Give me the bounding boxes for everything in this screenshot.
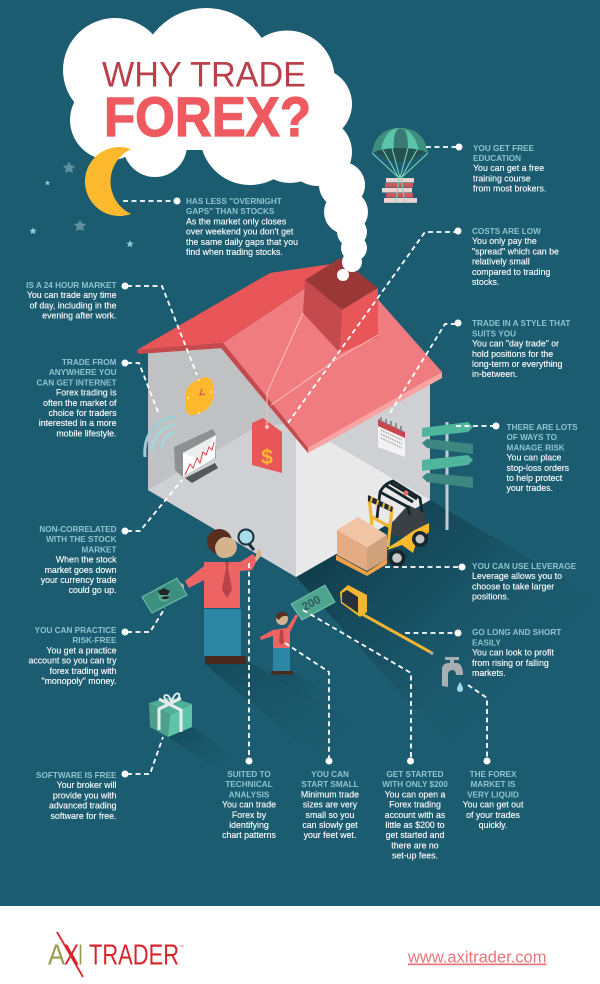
text: start small: sizes are very [303, 800, 358, 810]
icon: man with magnifying glass [176, 529, 261, 664]
text: trade from anywhere: choice for traders [49, 408, 117, 418]
text: trade style: SUITS YOU [472, 329, 516, 338]
text: technical analysis: chart patterns [222, 830, 276, 840]
footer logo: A [48, 940, 66, 972]
text: technical analysis: You can trade [222, 800, 276, 810]
text: technical analysis: ANALYSIS [229, 790, 270, 799]
forklift body [387, 523, 429, 553]
shadow: man [205, 660, 350, 770]
footer logo: ™ [180, 944, 184, 949]
text: only $200: account with as [385, 810, 446, 820]
icon: crescent moon [85, 147, 131, 216]
text: trade from anywhere: ANYWHERE YOU [49, 368, 117, 377]
text: manage risk: your trades. [506, 483, 553, 493]
text: technical analysis: SUITED TO [227, 770, 271, 779]
icon: $200 note [291, 585, 335, 620]
house back-right wall [296, 375, 430, 577]
text: start small: can slowly get [302, 820, 358, 830]
stars [29, 162, 134, 247]
icon: parachute with books [372, 128, 428, 203]
text: technical analysis: TECHNICAL [225, 780, 273, 789]
cloud and smoke [63, 8, 368, 281]
text: overnight gaps: As the market only closes [186, 216, 287, 226]
text: practice: account so you can try [28, 656, 117, 666]
text: costs are low: "spread" which can be [472, 246, 559, 256]
icon: monitor [174, 429, 218, 483]
text: only $200: GET STARTED [386, 770, 444, 779]
text: leverage: positions. [472, 592, 509, 602]
text: overnight gaps: the same daily gaps that you [186, 237, 298, 247]
text: software: software for free. [50, 811, 116, 821]
text: practice: You get a practice [46, 645, 117, 655]
footer logo: TRADER [89, 940, 179, 972]
text: overnight gaps: GAPS" THAN STOCKS [186, 207, 275, 216]
text: free education: YOU GET FREE [473, 144, 534, 153]
text: trade from anywhere: TRADE FROM [62, 358, 117, 367]
text: start small: START SMALL [301, 780, 359, 789]
text: non-correlated: When the stock [56, 555, 117, 565]
text: free education: EDUCATION [473, 154, 521, 163]
text: overnight gaps: over weekend you don't get [186, 227, 294, 237]
footer panel [0, 906, 600, 984]
text: liquid: quickly. [479, 820, 507, 830]
text: trade style: hold positions for the [472, 349, 553, 359]
text: liquid: You can get out [463, 800, 524, 810]
text: long and short: You can look to profit [472, 648, 554, 658]
forklift mast [369, 497, 392, 547]
forklift cage [377, 481, 422, 518]
text: free education: from most brokers. [473, 184, 546, 194]
text: manage risk: OF WAYS TO [506, 433, 558, 442]
text: start small: your feet wet. [304, 830, 356, 840]
man trousers [204, 609, 241, 656]
text: non-correlated: NON-CORRELATED [39, 525, 117, 534]
shadow: house [296, 500, 600, 770]
text: costs are low: COSTS ARE LOW [472, 227, 541, 236]
text: trade from anywhere: CAN GET INTERNET [36, 378, 116, 387]
text: long and short: markets. [472, 668, 506, 678]
connector: trade from anywhere [122, 360, 158, 412]
man shoes [205, 656, 246, 664]
text: trade style: in-between. [472, 369, 517, 379]
text: leverage: Leverage allows you to [472, 571, 562, 581]
text: liquid: VERY LIQUID [467, 790, 519, 799]
icon: gift box [149, 693, 192, 737]
icon: wifi [145, 417, 175, 457]
house right floor [296, 435, 430, 577]
text: only $200: little as $200 to [385, 820, 445, 830]
text: manage risk: MANAGE RISK [506, 443, 565, 452]
text: non-correlated: MARKET [81, 545, 116, 554]
icon: calendar [378, 417, 405, 457]
text: 24 hour market: You can trade any time [27, 290, 117, 300]
text: 24 hour market: evening after work. [42, 311, 116, 321]
text: trade style: TRADE IN A STYLE THAT [472, 319, 570, 328]
text: manage risk: THERE ARE LOTS [506, 423, 578, 432]
icon: clock [185, 377, 213, 415]
text: manage risk: stop-loss orders [506, 463, 570, 473]
text: 24 hour market: of day, including in the [30, 300, 117, 310]
connector: manage risk [456, 422, 500, 430]
text: only $200: Forex trading [389, 800, 441, 810]
text: liquid: THE FOREX [470, 770, 517, 779]
connectors [122, 144, 500, 778]
icon: tap with water drop [442, 657, 463, 692]
footer logo: X [64, 940, 79, 972]
text: software: Your broker will [57, 780, 117, 790]
shadow: gift [168, 727, 240, 775]
text: only $200: set-up fees. [392, 851, 438, 861]
text: trade from anywhere: mobile lifestyle. [56, 428, 116, 438]
man hands [176, 583, 184, 591]
text: software: SOFTWARE IS FREE [36, 771, 117, 780]
connector: free education [426, 144, 462, 150]
footer logo: I [78, 940, 83, 972]
text: costs are low: compared to trading [472, 267, 550, 277]
shadow: small man [271, 672, 345, 715]
text: trade style: You can "day trade" or [472, 339, 559, 349]
text: trade style: long-term or everything [472, 359, 563, 369]
icon: $200 note: 200 [300, 594, 323, 614]
footer url: www.axitrader.com [407, 948, 546, 966]
left roof eave [137, 343, 223, 354]
text: manage risk: to help protect [506, 473, 563, 483]
connector: long and short [405, 630, 462, 636]
text: costs are low: relatively small [472, 257, 530, 267]
text: non-correlated: market goes down [45, 565, 117, 575]
text: practice: "monopoly" money. [41, 676, 116, 686]
man hair [207, 529, 232, 554]
connector: software [122, 737, 163, 778]
text: only $200: You can open a [385, 789, 446, 799]
icon: signpost [422, 422, 473, 530]
icon: forklift with box [336, 481, 429, 576]
text: 24 hour market: IS A 24 HOUR MARKET [26, 281, 116, 290]
forklift wheels [388, 550, 406, 566]
connector: start small [285, 643, 332, 764]
text: long and short: from rising or falling [472, 658, 549, 668]
text: start small: YOU CAN [311, 770, 349, 779]
text: leverage: YOU CAN USE LEVERAGE [472, 562, 577, 571]
forklift engine [390, 505, 425, 538]
text: technical analysis: Forex by [232, 810, 267, 820]
text: trade from anywhere: Forex trading is [56, 388, 117, 398]
magnifying glass [249, 544, 254, 550]
text: costs are low: You only pay the [472, 236, 537, 246]
icon: price tag [252, 313, 378, 473]
man tie [222, 562, 232, 598]
connector: non-correlated [122, 480, 182, 534]
title line 1: WHY TRADE [102, 56, 306, 94]
text: only $200: there are no [391, 840, 439, 850]
text: liquid: of your trades [466, 810, 520, 820]
text: overnight gaps: find when trading stocks. [186, 247, 283, 257]
text: practice: forex trading with [50, 666, 117, 676]
connector: practice [122, 608, 165, 636]
chimney [303, 258, 378, 353]
text: only $200: WITH ONLY $200 [382, 780, 448, 789]
right roof [223, 262, 442, 448]
text: trade from anywhere: interested in a more [39, 418, 117, 428]
connector: leverage [385, 564, 466, 570]
footer logo [48, 932, 184, 977]
house back-left wall [148, 346, 296, 577]
box [337, 517, 387, 548]
text: liquid: MARKET IS [470, 780, 516, 789]
icon: banknote with portrait [142, 578, 187, 613]
text: free education: You can get a free [473, 163, 544, 173]
text: non-correlated: WITH THE STOCK [46, 535, 117, 544]
text: start small: small so you [306, 810, 355, 820]
text: only $200: get started and [386, 830, 444, 840]
title line 2: FOREX? [104, 85, 311, 148]
house [137, 258, 442, 577]
text: costs are low: stocks. [472, 277, 499, 287]
connector: 24 hour [122, 282, 197, 375]
text: manage risk: You can place [506, 453, 562, 463]
connector: technical analysis [246, 563, 252, 764]
text: non-correlated: could go up. [69, 585, 116, 595]
man face [215, 537, 237, 558]
man shirt [185, 554, 257, 608]
house left floor [148, 423, 296, 577]
icon: tape measure [340, 585, 433, 654]
connector: liquid [468, 685, 490, 764]
text: overnight gaps: HAS LESS "OVERNIGHT [186, 197, 282, 206]
text: software: provide you with [53, 790, 117, 800]
text: software: advanced trading [49, 801, 117, 811]
left roof [137, 262, 345, 350]
icon: small man holding note [260, 612, 298, 674]
text: trade from anywhere: often the market of [43, 398, 117, 408]
text: leverage: choose to take larger [472, 581, 554, 591]
text: long and short: GO LONG AND SHORT [472, 628, 561, 637]
text: practice: YOU CAN PRACTICE [35, 626, 117, 635]
text: free education: training course [473, 173, 531, 183]
connector: trade style [390, 320, 462, 413]
roof valley edge [221, 343, 308, 453]
text: start small: Minimum trade [301, 789, 359, 799]
text: practice: RISK-FREE [72, 636, 117, 645]
right roof eave [308, 372, 442, 453]
title [102, 56, 311, 148]
text: long and short: EASILY [472, 638, 501, 647]
pallet [336, 555, 387, 576]
connector: overnight gaps [123, 198, 180, 204]
text: non-correlated: your currency trade [41, 575, 117, 585]
connector: only $200 [303, 610, 414, 764]
icon: price tag: $ [261, 446, 273, 469]
connector: costs are low [288, 228, 462, 423]
text: technical analysis: identifying [229, 820, 269, 830]
